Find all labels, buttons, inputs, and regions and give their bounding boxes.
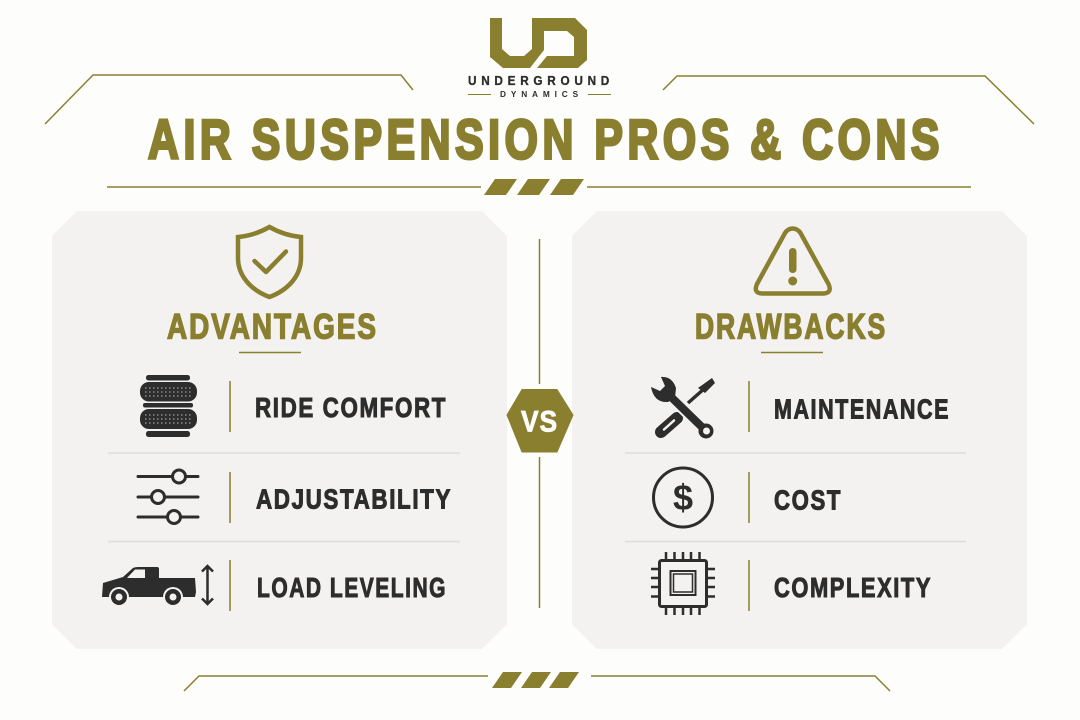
heading: drawbacks: DRAWBACKS [695, 308, 887, 346]
bottom decorative frame [184, 672, 890, 691]
icon: shield check [238, 227, 301, 297]
logo: Underground Dynamics [468, 18, 614, 99]
row: maintenance [651, 377, 950, 438]
label: COST [774, 484, 842, 516]
icon: air spring [140, 375, 197, 437]
row: load leveling [102, 560, 447, 611]
title divider with stripes [107, 179, 971, 195]
center vertical divider [538, 239, 540, 608]
heading: advantages: ADVANTAGES [167, 308, 378, 346]
row: complexity [651, 552, 932, 615]
icon: pickup truck with arrow [102, 566, 213, 607]
VS badge: VS [521, 406, 558, 438]
row: adjustability [138, 470, 452, 524]
panel: advantages [52, 211, 507, 649]
label: RIDE COMFORT [255, 392, 447, 423]
icon: dollar coin: $ [673, 477, 693, 518]
icon: sliders [138, 470, 198, 524]
decorative frame top right [663, 76, 1034, 124]
label: LOAD LEVELING [257, 572, 447, 603]
row: ride comfort [140, 375, 447, 437]
icon: dollar coin [654, 468, 712, 527]
icon: warning triangle [756, 228, 830, 294]
label: ADJUSTABILITY [256, 484, 452, 514]
icon: wrench and screwdriver [651, 377, 715, 438]
label: COMPLEXITY [774, 572, 932, 603]
VS badge [507, 390, 573, 452]
panel: drawbacks [572, 211, 1027, 649]
decorative frame top left [45, 75, 413, 124]
logo: Underground Dynamics: UNDERGROUND [468, 74, 614, 88]
icon: microchip [651, 552, 715, 615]
logo: Underground Dynamics: DYNAMICS [500, 89, 583, 99]
row: cost [654, 468, 842, 527]
label: MAINTENANCE [774, 394, 950, 424]
